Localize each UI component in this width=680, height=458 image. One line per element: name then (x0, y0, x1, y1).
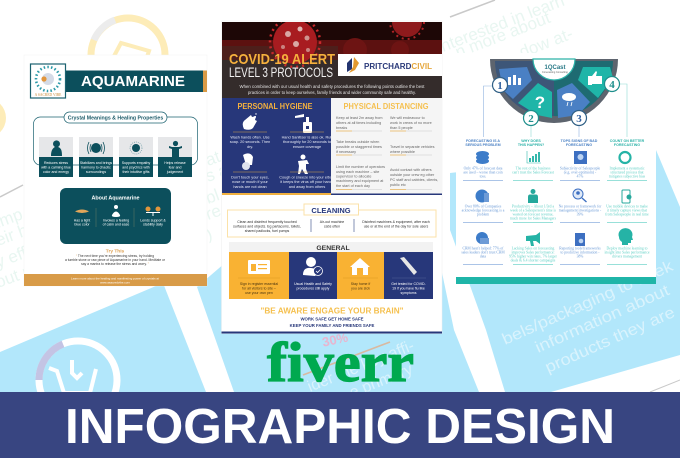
tile: get tested: 19 if you have flu like (392, 286, 425, 290)
background: faded rotated text: bl (203, 185, 222, 208)
panel: About Aquamarine: Lends support & (140, 218, 166, 222)
panel: COVID-19 protocols infographic (222, 5, 442, 334)
panel: general: GENERAL (316, 245, 350, 252)
panel: physical distancing: outside your crew eg other (390, 173, 435, 177)
icon: cough into elbow (298, 154, 309, 174)
panel: cleaning: Air-out machine (320, 220, 344, 224)
panel: personal hygiene: Wash hands often. Use (230, 136, 270, 140)
panel: physical distancing: than 5 people (390, 126, 413, 130)
background: faded rotated text: s a (203, 160, 231, 186)
column headings: SERIOUS PROBLEM (465, 143, 501, 147)
segment 2: question mark: ? (535, 93, 545, 112)
Aquamarine title banner: AQUAMARINE (81, 73, 185, 90)
column headings (465, 139, 645, 147)
logo: Pritchard Civil (338, 54, 442, 76)
row 2 (462, 189, 649, 222)
row 2: No process or framework for (559, 204, 602, 208)
card: stabilizes: harmony to chaotic (81, 166, 111, 170)
column headings: WHY DOES (521, 139, 541, 143)
panel: About Aquamarine: Has a light (74, 218, 90, 222)
row 3: Lacking Sales on forecasting (512, 246, 555, 250)
card: fear and judgement: judgement (166, 170, 183, 174)
background: faded rotated text: information about (533, 282, 673, 357)
slogan: WORK SAFE GET HOME SAFE (300, 316, 364, 322)
icon: CRM gear (476, 232, 489, 244)
tile: sign in register: Sign in register essential (240, 282, 278, 286)
panel: physical distancing: Keep at least 2m away from (336, 116, 382, 120)
panel: physical distancing: Avoid contact with others (390, 168, 432, 172)
panel: physical distancing: PC staff and cabbies, clients, (390, 178, 438, 182)
card: relieves stress: color and energy (43, 170, 69, 174)
icon: mobile device (622, 190, 632, 203)
icon: head with gears (619, 228, 633, 245)
virus spheres (268, 22, 425, 68)
icon: business person (528, 189, 538, 203)
row 2: 39% (577, 212, 583, 216)
panel: physical distancing: Take breaks outside when (336, 140, 379, 144)
panel: Aquamarine infographic (24, 55, 207, 286)
icon: clipboard (575, 233, 585, 246)
row 1: can't trust the Sales Forecast (512, 170, 554, 174)
panel: About Aquamarine (60, 188, 171, 244)
icon: hand sanitiser (295, 114, 312, 133)
segment 4: thumbs up (578, 67, 613, 98)
semicircle diagram: 1QCast (544, 65, 566, 71)
icon: balance scale (146, 206, 160, 216)
number badges: 1 (497, 80, 503, 92)
footer bar (24, 274, 207, 286)
row 1: are used – worse than coin (463, 170, 503, 174)
row 1: Subjectivity of Salespeople (560, 166, 601, 170)
card: stabilizes (79, 137, 113, 177)
card: relieves stress (39, 137, 73, 177)
icon: meditating person (112, 205, 120, 217)
segment 1: bars (499, 67, 532, 99)
row 2: wasted on forecast revenue, (513, 212, 554, 218)
row 1: toss. (480, 174, 486, 178)
slogan: "BE AWARE ENGAGE YOUR BRAIN" (260, 306, 404, 316)
panel: About Aquamarine: About Aquamarine (91, 196, 140, 202)
card: empathy: Supports empathy (122, 161, 150, 165)
panel: physical distancing: work in crews of no more (390, 121, 432, 125)
row 1: 47% (577, 174, 583, 178)
row 1: (e.g. over-optimism) - (564, 170, 597, 174)
panel: personal hygiene: nose or mouth if your (232, 180, 269, 184)
panel: physical distancing: supervisor to allocate (336, 174, 371, 178)
tile: health and safety (289, 252, 337, 299)
footer bar: Learn more about the healing and manifesting power of crystals at (71, 276, 159, 280)
panel: personal hygiene (222, 98, 335, 195)
row 2: problem (477, 212, 489, 216)
row 3: 38% (577, 254, 583, 258)
card: relieves stress: Reduces stress (44, 161, 68, 165)
header with virus image: COVID-19 ALERT (229, 51, 335, 68)
background: faded ring icons: 30% (321, 329, 350, 350)
row 2: it timely capture views that (607, 208, 647, 212)
panel: About Aquamarine: stability daily (143, 222, 163, 226)
text block: Try This: “ The next time you're experiencing stress, try holding (76, 254, 154, 258)
Aquamarine title banner (66, 70, 207, 92)
column headings: FORECASTING IS A (466, 139, 500, 143)
panel: physical distancing: where possible (390, 150, 415, 154)
card: fear and judgement: Helps release (164, 161, 186, 165)
card: stabilizes: surroundings (86, 170, 106, 174)
semicircle diagram (490, 59, 620, 126)
panel: cleaning: surfaces and objects. Eg partacoms, toilets, (233, 224, 301, 228)
footer bar: www.asacredvibe.com (100, 280, 130, 284)
header with virus image: When combined with our usual health and safety procedures the following points outline the best (240, 84, 425, 89)
icon: circular arrows (620, 152, 630, 163)
number badges: 3 (576, 113, 582, 125)
row 1: Implement a systematic (609, 166, 645, 170)
row 1: Only 47% of forecast data (464, 166, 503, 170)
background: faded rotated text: ) (203, 224, 215, 244)
icon: feather (75, 210, 89, 213)
panel: cleaning: cabs often (324, 224, 340, 228)
panel: physical distancing: public etc (390, 183, 406, 187)
row 3: sales leaders don't trust CRM (461, 250, 505, 254)
banner: Infographic Design: INFOGRAPHIC DESIGN (65, 400, 615, 454)
panel: personal hygiene: soap. 20 seconds. Then (230, 140, 270, 144)
panel: physical distancing: Travel in separate vehicles (390, 145, 435, 149)
icon: globe (476, 190, 489, 202)
background: faded rotated text: bels/packaging to seek (500, 257, 677, 349)
logo: A Sacred Vibe: A SACRED VIBE (35, 93, 62, 97)
row 1: The rest of the business (516, 166, 551, 170)
teal footer bar (456, 277, 656, 284)
row 2: from Salespeople in real time (605, 212, 649, 216)
panel: personal hygiene: dry. (247, 145, 253, 149)
panel: personal hygiene: ensure coverage (293, 145, 321, 149)
panel: cleaning: shared padlocks, fuel pumps (245, 229, 290, 233)
panel: About Aquamarine: Invokes a feeling (103, 218, 129, 222)
panel: physical distancing: Limit the number of operators (336, 165, 385, 169)
background: faded rotated text: at (203, 147, 223, 170)
logo: fiverr: fiverr (267, 332, 414, 394)
text block: Try This (65, 248, 166, 266)
panel: personal hygiene: Cough or sneeze into your elbow (279, 176, 335, 180)
panel: physical distancing: We will endeavour to (390, 116, 425, 120)
background: faded rotated text: re (203, 201, 224, 224)
background: faded rotated text: ider the key affi- (305, 337, 417, 396)
background: faded rotated text: products they are (543, 304, 678, 377)
tile: get tested: Get tested for COVID- (391, 282, 427, 286)
background: faded rotated text: n more about (453, 8, 553, 62)
column headings: FORECASTING (566, 143, 592, 147)
panel: personal hygiene: Don't touch your eyes, (231, 176, 269, 180)
row 2: Use mobile devices to make (606, 204, 648, 208)
tile: get tested (384, 252, 433, 299)
leader lines (484, 84, 627, 137)
background: faded rotated text: dow at- (517, 24, 575, 62)
panel: physical distancing: the start of each day (336, 184, 370, 188)
heading outline: crystal meanings (34, 112, 198, 165)
card: stabilizes: Stabilizes and brings (80, 161, 112, 165)
panel: personal hygiene: Hand Sanitiser is also ok. Rub (282, 136, 332, 140)
row 2: acknowledge forecasting is a (462, 208, 505, 212)
row 3: insight into Sales performance (605, 250, 650, 254)
background: light blue shapes (0, 150, 680, 392)
panel: personal hygiene: thoroughly for 20 seconds to (283, 140, 331, 144)
column headings: THIS HAPPEN? (518, 143, 544, 147)
tile: health and safety: Usual Health and Safety (294, 282, 332, 286)
column headings: TOPS SIGNS OF BAD (561, 139, 598, 143)
panel: sales forecasting infographic (456, 53, 656, 284)
number badges (492, 76, 620, 126)
row 3: Reporting tools/frameworks (559, 246, 601, 250)
tile: sign in register (229, 252, 289, 299)
tile: sign in register: use your own pen (245, 291, 273, 295)
row 3: 95% higher win rates, 7% larger (509, 254, 558, 260)
row 1: structured process that (610, 170, 644, 174)
card: fear and judgement (158, 137, 192, 177)
row 3: improves Sales performance: (511, 250, 555, 254)
card: relieves stress: with a calming blue (41, 166, 71, 170)
text block: Try This: Try This (106, 248, 125, 254)
card: empathy (119, 137, 153, 177)
tile: stay home (337, 252, 384, 299)
card: empathy: and psychics with (122, 166, 150, 170)
panel: physical distancing: possible or staggered times (336, 145, 382, 149)
row 2: much more for Sales Managers (510, 216, 557, 220)
background: faded rotated text: e primary (347, 361, 415, 402)
row 3: CRM hasn't helped: 77% of (462, 246, 504, 250)
icon: megaphone (526, 232, 540, 246)
icon: light bulb (574, 151, 587, 164)
tile: stay home: Stay home if (351, 282, 370, 286)
row 1 (463, 151, 647, 180)
panel: physical distancing: breaks (336, 126, 347, 130)
row 3: to predictive information - (560, 250, 600, 254)
text block: Try This: a tumble stone or raw piece of Aquamarine in your hand. Meditate or (65, 258, 166, 262)
text block: Try This: say a mantra to release the stress and worry. ” (81, 262, 149, 266)
panel: personal hygiene: and away from others (289, 185, 325, 189)
tile: stay home: you are sick (351, 286, 370, 290)
panel: physical distancing: others at all times including (336, 121, 381, 125)
header with virus image (222, 22, 442, 98)
logo: Pritchard Civil: PRITCHARDCIVIL (364, 62, 432, 71)
tile: get tested: symptoms (401, 291, 417, 295)
tile: health and safety: procedures still apply (297, 286, 330, 290)
panel: personal hygiene: PERSONAL HYGIENE (238, 102, 313, 111)
icon: magnifier person (573, 189, 586, 202)
segment 3: storm cloud (557, 83, 590, 118)
banner: Infographic Design (0, 392, 680, 458)
header with virus image: LEVEL 3 PROTOCOLS (229, 65, 333, 80)
panel: cleaning: use or at the end of the day for sole users (364, 224, 429, 228)
card: fear and judgement: fear and (169, 166, 181, 170)
row 1: mitigates subjective bias (609, 174, 646, 178)
icon: washing hands (243, 113, 257, 130)
row 3: Deploy machine learning to (606, 246, 648, 250)
panel: physical distancing (331, 98, 442, 195)
panel: cleaning: Clean and disinfect frequently touched (237, 220, 297, 224)
panel: personal hygiene: it keeps the virus off your hands (280, 180, 334, 184)
row 3 (461, 228, 650, 264)
row 3: deals & 6.4 shorter campaigns (511, 258, 556, 262)
panel: personal hygiene: hands are not clean (233, 185, 267, 189)
icon: do not touch face (242, 153, 253, 170)
icon: growth chart (527, 151, 541, 163)
icon: coin stack (476, 151, 489, 164)
panel: About Aquamarine: blue color (74, 222, 90, 226)
panel: physical distancing: machinery and equipment at (336, 179, 384, 183)
panel: About Aquamarine: of calm and ease (103, 222, 129, 226)
semicircle diagram: Forecasting Consulting (542, 71, 568, 74)
card: empathy: their intuitive gifts (122, 170, 150, 174)
logo: A Sacred Vibe (30, 64, 66, 98)
row 3: drivers management (612, 254, 642, 258)
panel: physical distancing: if necessary (336, 150, 356, 154)
panel: cleaning: CLEANING (311, 206, 351, 215)
row 2: management investigations - (559, 208, 602, 212)
column headings: FORECASTING (614, 143, 640, 147)
row 2: week of a Salesperson's time is (510, 208, 556, 212)
header with virus image: practices in order to keep ourselves, family friends and wider community safe and healthy. (248, 90, 416, 95)
tile: sign in register: for all visitors to site – (242, 286, 276, 290)
row 3: data (480, 254, 486, 258)
heading outline: crystal meanings: Crystal Meanings & Healing Properties (68, 116, 163, 122)
panel: general (229, 242, 433, 299)
number badges: 2 (528, 113, 534, 125)
column headings: COUNT ON BETTER (610, 139, 645, 143)
panel: physical distancing: using each machine – site (336, 170, 379, 174)
row 2: Productivity – About 1/3rd a (512, 204, 554, 208)
slogan: KEEP YOUR FAMILY AND FRIENDS SAFE (290, 323, 374, 328)
panel: cleaning: Disinfect machines & equipment, after each (362, 220, 430, 224)
number badges: 4 (609, 79, 615, 91)
row 2: Over 80% of Companies (465, 204, 502, 208)
slogan (260, 306, 404, 328)
panel: physical distancing: PHYSICAL DISTANCING (344, 102, 428, 111)
panel: cleaning (228, 204, 436, 237)
